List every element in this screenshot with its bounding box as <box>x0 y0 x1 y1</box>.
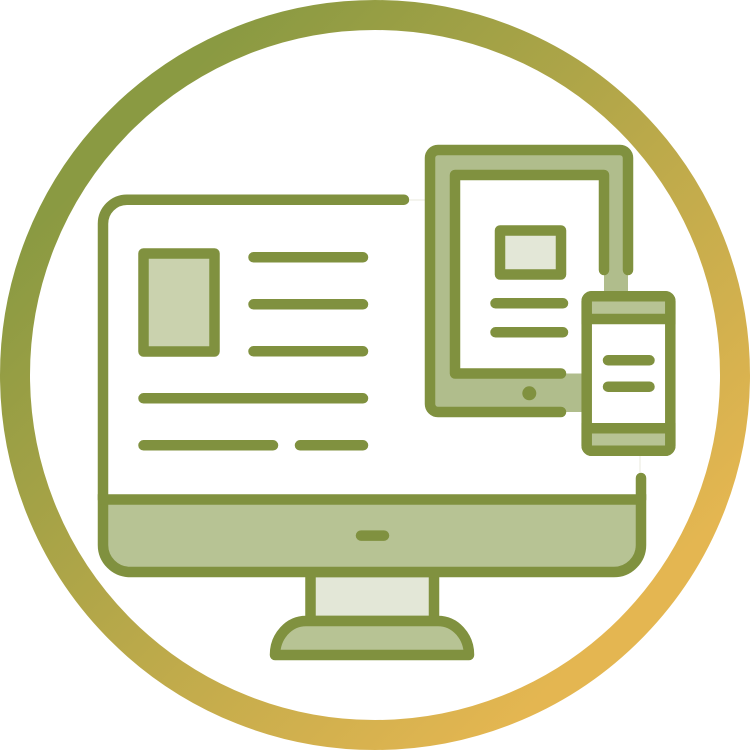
tablet text lines <box>496 303 563 332</box>
monitor screen outline <box>103 200 641 499</box>
tablet image block <box>500 230 561 274</box>
content text lines <box>144 257 363 445</box>
monitor chin panel <box>103 500 641 572</box>
phone text lines <box>608 360 650 387</box>
faint guide lines <box>409 200 640 473</box>
icon: smartphone <box>587 296 670 451</box>
monitor stand base <box>275 621 469 655</box>
icon: desktop monitor <box>103 200 641 655</box>
monitor power button <box>361 530 384 541</box>
tablet bezel fill <box>430 150 628 412</box>
icon: tablet <box>430 150 628 412</box>
tablet outer outline <box>430 150 628 412</box>
phone body <box>587 296 670 451</box>
content image block <box>144 254 214 352</box>
phone bottom band <box>587 428 670 451</box>
monitor stand neck <box>310 572 434 621</box>
tablet screen outline <box>455 175 604 374</box>
phone top band <box>587 296 670 319</box>
tablet home button <box>522 386 536 400</box>
